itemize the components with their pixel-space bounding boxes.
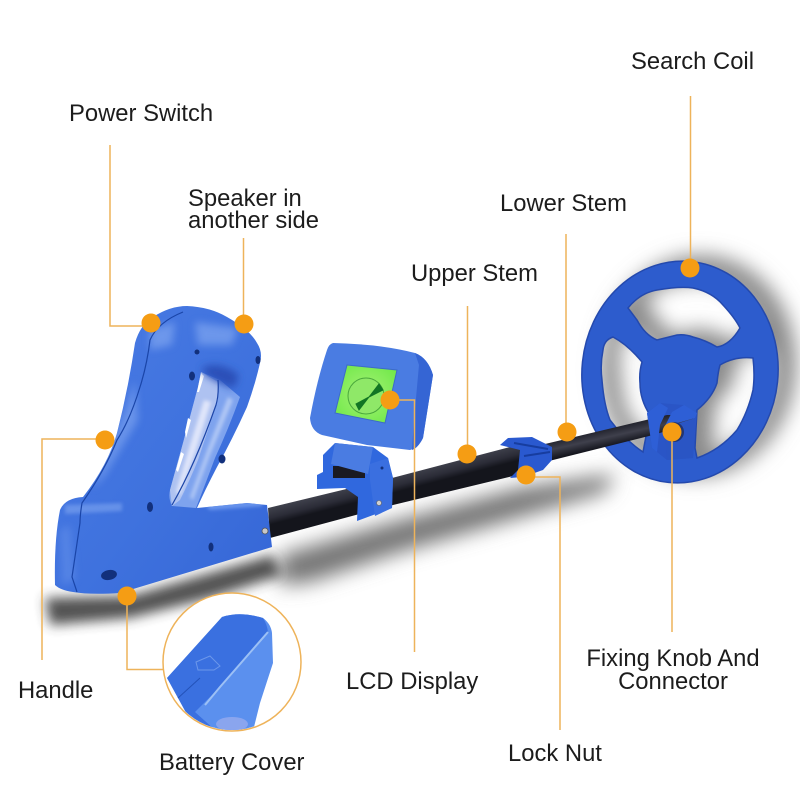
battery cover inset: [163, 593, 301, 735]
search coil: [582, 261, 778, 483]
labels: Upper Stem: [411, 260, 538, 287]
labels: Lower Stem: [500, 190, 627, 217]
display bracket: [317, 443, 393, 521]
LCD screen: [335, 365, 397, 423]
labels: Connector: [618, 668, 728, 695]
coil shadow: [600, 255, 796, 477]
labels: Power Switch: [69, 100, 213, 127]
labels: LCD Display: [346, 668, 478, 695]
handle grip opening: [169, 372, 240, 508]
upper stem: [268, 443, 530, 538]
connector mount back: [647, 403, 697, 460]
ground shadow: [45, 474, 615, 625]
lock nut: [500, 437, 552, 478]
labels: Handle: [18, 677, 93, 704]
callout dots: [96, 258, 700, 606]
labels: another side: [188, 207, 319, 234]
labels: Lock Nut: [508, 740, 602, 767]
handle shading: [60, 322, 262, 585]
LCD display: [310, 343, 433, 450]
labels: Fixing Knob And: [586, 645, 760, 672]
labels: Battery Cover: [159, 749, 305, 776]
handle: [55, 306, 272, 594]
connector front: [647, 403, 697, 460]
labels: Speaker in: [188, 185, 302, 212]
lower stem: [545, 415, 693, 462]
labels: Search Coil: [631, 48, 754, 75]
leader lines: [42, 96, 690, 730]
